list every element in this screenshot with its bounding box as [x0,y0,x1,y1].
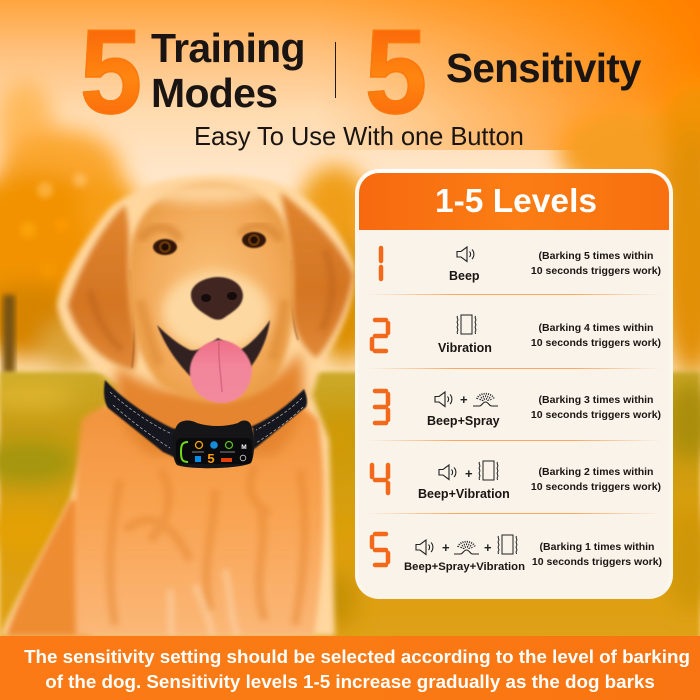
trees left [0,80,140,371]
nose [191,277,243,320]
tree texture left [20,173,87,278]
title number: 5 training modes: 5 [80,5,142,139]
mode label: Beep: Beep [449,269,480,283]
trees right and behind dog [297,75,700,375]
icon: beep plus spray: + [460,392,468,407]
level digit 5 [372,534,388,565]
trigger text level 1: (Barking 5 times within [539,250,653,262]
icon: beep plus vibration: + [465,466,473,481]
level digit 3 [375,391,388,423]
footer text [24,646,690,692]
trigger text level 3: (Barking 3 times within [539,394,653,406]
grass [0,372,700,642]
ears [68,205,137,370]
title: Training Modes: Modes [151,70,277,116]
trigger text level 5: 10 seconds triggers work) [532,556,662,568]
title: Training Modes [151,25,305,116]
neck [116,350,303,455]
icon: beep plus spray plus vibration: + [442,540,450,555]
level digit 2 [372,320,388,351]
fur rim glow [0,175,354,636]
trigger text level 1: 10 seconds triggers work) [531,264,661,276]
trigger text level 3: 10 seconds triggers work) [531,408,661,420]
mouth [157,320,270,376]
brow and cheek shading [140,226,280,240]
title number: 5 sensitivity: 5 [365,5,427,139]
panel heading: 1-5 Levels [435,183,597,220]
trigger text level 2 [531,322,661,348]
trigger text level 2: 10 seconds triggers work) [531,336,661,348]
head [128,183,294,403]
level digit 1 [379,248,383,279]
collar strap [104,380,180,460]
muzzle [162,272,270,352]
footer banner [0,636,700,700]
chest fur [74,395,324,636]
tongue [190,340,252,403]
icon: beep [457,247,474,262]
collar device: M [241,444,247,451]
footer text: The sensitivity setting should be selected according to the level of barking [24,646,690,667]
trigger text level 5 [532,541,662,568]
title: Sensitivity: Sensitivity [446,45,641,91]
icon: beep plus vibration [439,461,498,481]
trigger text level 4: (Barking 2 times within [539,466,653,478]
trigger text level 4 [531,466,661,492]
panel: 1-5 levels [355,169,673,599]
trigger text level 2: (Barking 4 times within [539,322,653,334]
trigger text level 3 [531,394,661,420]
mode label: Beep+Spray: Beep+Spray [427,414,500,428]
icon: beep plus spray plus vibration [416,535,517,555]
haunch [6,500,90,636]
panel heading [359,173,669,230]
eyes [153,239,177,255]
trigger text level 5: (Barking 1 times within [540,541,654,553]
icon: beep plus spray [435,392,498,407]
title divider [335,42,336,98]
trigger text level 4: 10 seconds triggers work) [531,480,661,492]
icon: beep plus spray plus vibration: + [484,540,492,555]
collar device: 5 [207,451,215,466]
trigger text level 1 [531,250,661,276]
mode label: Beep+Spray+Vibration: Beep+Spray+Vibration [404,561,525,573]
footer text: of the dog. Sensitivity levels 1-5 increase gradually as the dog barks [45,671,655,692]
level digit 4 [372,465,388,493]
icon: vibration [457,315,476,334]
subtitle: Easy To Use With one Button [194,123,524,151]
forehead highlight [143,183,267,203]
mode label: Beep+Vibration: Beep+Vibration [418,487,510,501]
mode label: Vibration: Vibration [438,341,492,355]
collar device [173,420,254,468]
title: Training Modes: Training [151,25,305,71]
tree trunk [3,295,15,375]
dog [0,175,354,636]
